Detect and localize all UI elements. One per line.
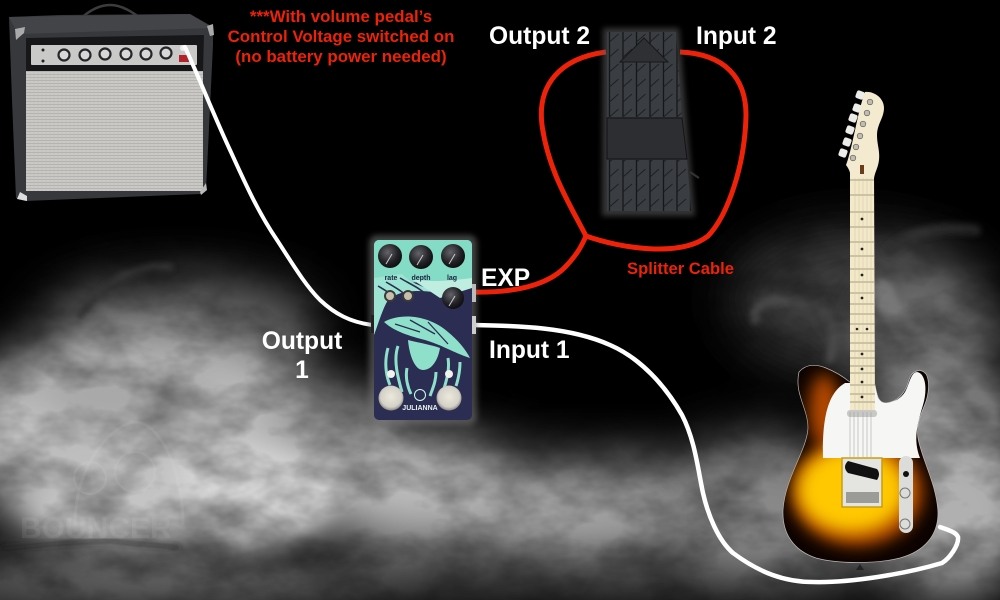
body — [783, 365, 938, 562]
amp corners — [17, 192, 27, 201]
pedal knobs — [378, 244, 402, 268]
label: splitter cable: Splitter Cable — [627, 259, 734, 278]
tuners — [838, 90, 865, 158]
label: input 2: Input 2 — [696, 23, 777, 50]
knob labels: lag — [447, 275, 457, 282]
red splitter cable: branch to output 2 — [541, 52, 606, 236]
amp cabinet — [9, 14, 213, 201]
note text: ***With volume pedal’s — [250, 7, 432, 26]
bridge plate — [842, 458, 882, 507]
knob labels — [385, 275, 457, 282]
red splitter cable: branch to input 2 — [586, 52, 746, 249]
wave foam — [374, 240, 472, 282]
note text: Control Voltage switched on — [228, 27, 454, 46]
hair strands — [386, 346, 460, 396]
label: output 1: 1 — [295, 357, 309, 384]
pedal name: JULIANNA — [402, 405, 438, 412]
watermark logo — [20, 422, 183, 545]
footswitches — [378, 386, 404, 410]
expression pedal — [602, 28, 699, 216]
amp grille — [26, 71, 203, 191]
pedal enclosure — [374, 240, 472, 420]
LEDs — [387, 370, 395, 378]
side jacks — [371, 315, 376, 333]
amp power switch — [179, 55, 189, 62]
amp handle — [80, 5, 142, 19]
pickguard — [823, 372, 925, 458]
saddles — [846, 492, 879, 503]
amplifier — [9, 5, 214, 201]
fret markers — [856, 218, 868, 398]
bridge pickup — [845, 461, 879, 480]
knob labels: depth — [411, 275, 431, 282]
label: output 1: Output — [262, 328, 342, 355]
Julianna pedal — [369, 235, 477, 425]
wave lines — [378, 277, 424, 293]
pedal top tread — [607, 32, 682, 117]
note text: (no battery power needed) — [235, 47, 447, 66]
neck pickup — [847, 410, 877, 417]
amp control panel — [31, 45, 197, 65]
face — [408, 340, 440, 370]
label: EXP: EXP — [481, 265, 530, 292]
sunburst — [791, 374, 923, 546]
label: output 2: Output 2 — [489, 23, 590, 50]
toggle switches — [385, 291, 413, 301]
strings — [850, 412, 871, 457]
strap button — [856, 564, 864, 570]
hat — [384, 317, 470, 358]
note text — [228, 7, 454, 66]
amp knobs — [58, 48, 172, 60]
pedal plate — [607, 118, 687, 159]
dark smoke seam — [0, 541, 180, 549]
smoke wisps — [80, 229, 985, 410]
label: input 1: Input 1 — [489, 337, 570, 364]
neck — [850, 170, 875, 410]
white cable: input 1 to guitar — [472, 325, 958, 582]
headstock — [846, 92, 884, 178]
red splitter cable: EXP to splitter — [472, 236, 586, 292]
pedal bottom tread — [607, 160, 691, 211]
control plate — [899, 456, 913, 533]
white cable: amp to output 1 — [185, 47, 372, 325]
knob labels: rate — [385, 275, 398, 282]
logo ring — [414, 390, 426, 400]
watermark logo: BOUNCER — [20, 512, 172, 545]
guitar — [783, 90, 938, 563]
teal top panel — [374, 240, 472, 282]
